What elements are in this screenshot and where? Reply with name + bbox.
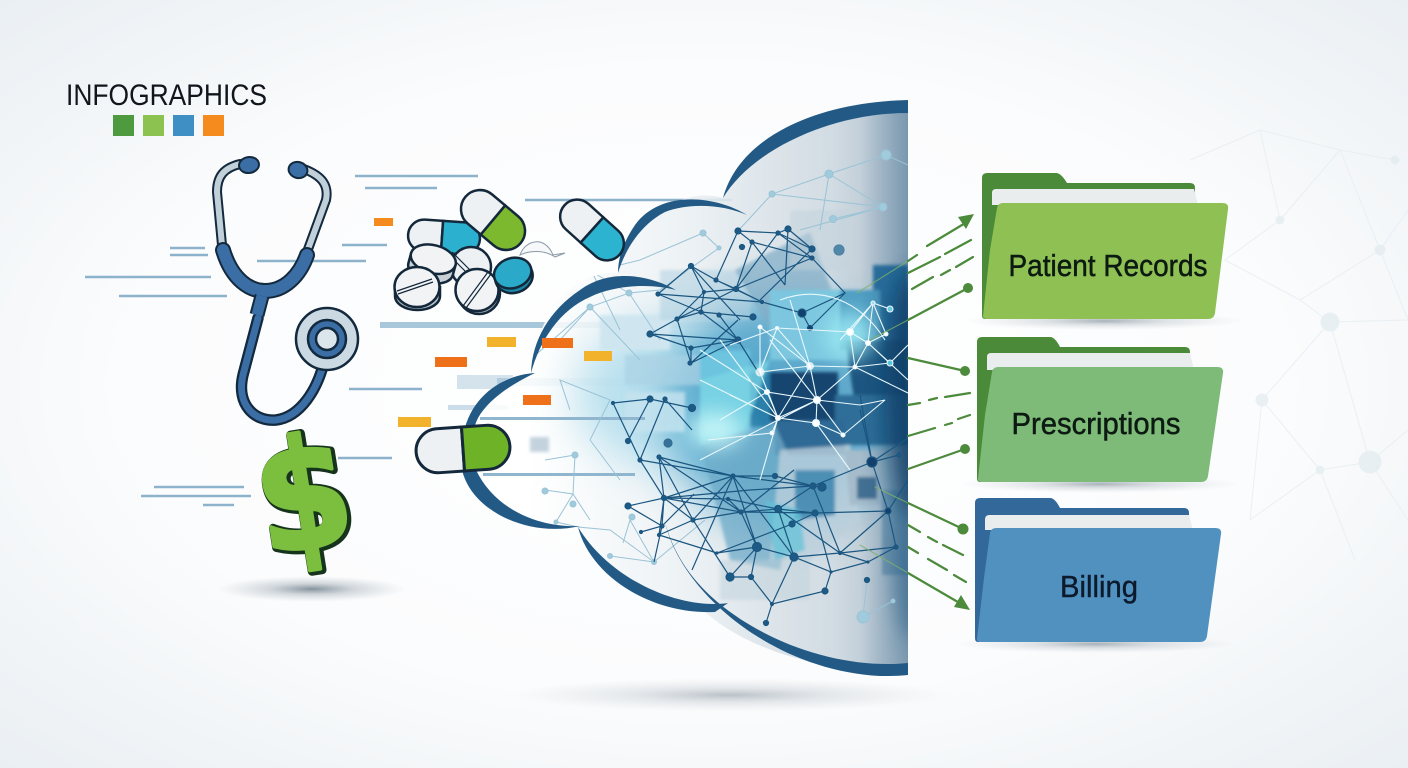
tablet: lower left xyxy=(394,267,440,310)
pale data bars crossing into cloud xyxy=(380,322,725,410)
stethoscope yoke xyxy=(223,250,307,291)
tablet: tilted xyxy=(405,240,459,288)
arrows to billing xyxy=(908,503,970,610)
stethoscope ear tips xyxy=(238,156,260,174)
stethoscope chest piece xyxy=(296,308,358,370)
tablet: back xyxy=(451,247,491,287)
folder: Prescriptions: Prescriptions xyxy=(1012,406,1180,441)
folder: Billing xyxy=(955,498,1235,653)
folder: Billing: Billing xyxy=(1060,569,1138,604)
torn foil xyxy=(520,242,565,257)
icon: dollar sign xyxy=(217,402,407,602)
network: pale nodes xyxy=(530,150,908,623)
icon: white and green capsule xyxy=(415,424,511,474)
network: bright white nodes xyxy=(700,294,908,480)
icon: white and blue capsule xyxy=(553,193,631,267)
cloud outline crescents xyxy=(462,100,908,676)
stethoscope chest tube xyxy=(242,318,325,420)
capsule: white and green xyxy=(453,182,533,258)
icon: pills pile xyxy=(394,182,565,314)
folder: Patient Records: Patient Records xyxy=(1008,248,1208,283)
background network: right side xyxy=(1190,130,1408,560)
icon: stethoscope xyxy=(217,156,358,420)
cloud shape xyxy=(461,100,950,712)
icon: dollar sign: $ xyxy=(245,403,366,592)
network: dark nodes xyxy=(612,226,908,626)
heading: INFOGRAPHICS: INFOGRAPHICS xyxy=(66,79,267,112)
tablet: front xyxy=(456,269,500,314)
cloud interior: data blocks and glow xyxy=(528,113,908,664)
icon: dollar sign: $ xyxy=(243,402,364,591)
stethoscope ear tubes xyxy=(217,164,240,245)
folder: Prescriptions xyxy=(960,337,1240,493)
colour squares xyxy=(113,115,224,136)
orange and yellow data blocks xyxy=(374,218,612,427)
folder: Patient Records xyxy=(965,173,1245,330)
arrows: cloud to folders xyxy=(857,214,974,610)
capsule: white and teal back xyxy=(407,219,481,255)
arrows to prescriptions xyxy=(908,358,970,469)
tablet: teal xyxy=(490,253,537,298)
faint arrow tails inside cloud xyxy=(857,261,908,573)
thin data bars over cloud xyxy=(480,417,645,476)
heading: INFOGRAPHICS xyxy=(66,79,267,136)
arrows to patient records xyxy=(908,214,974,320)
speed lines: data stream xyxy=(85,176,732,505)
